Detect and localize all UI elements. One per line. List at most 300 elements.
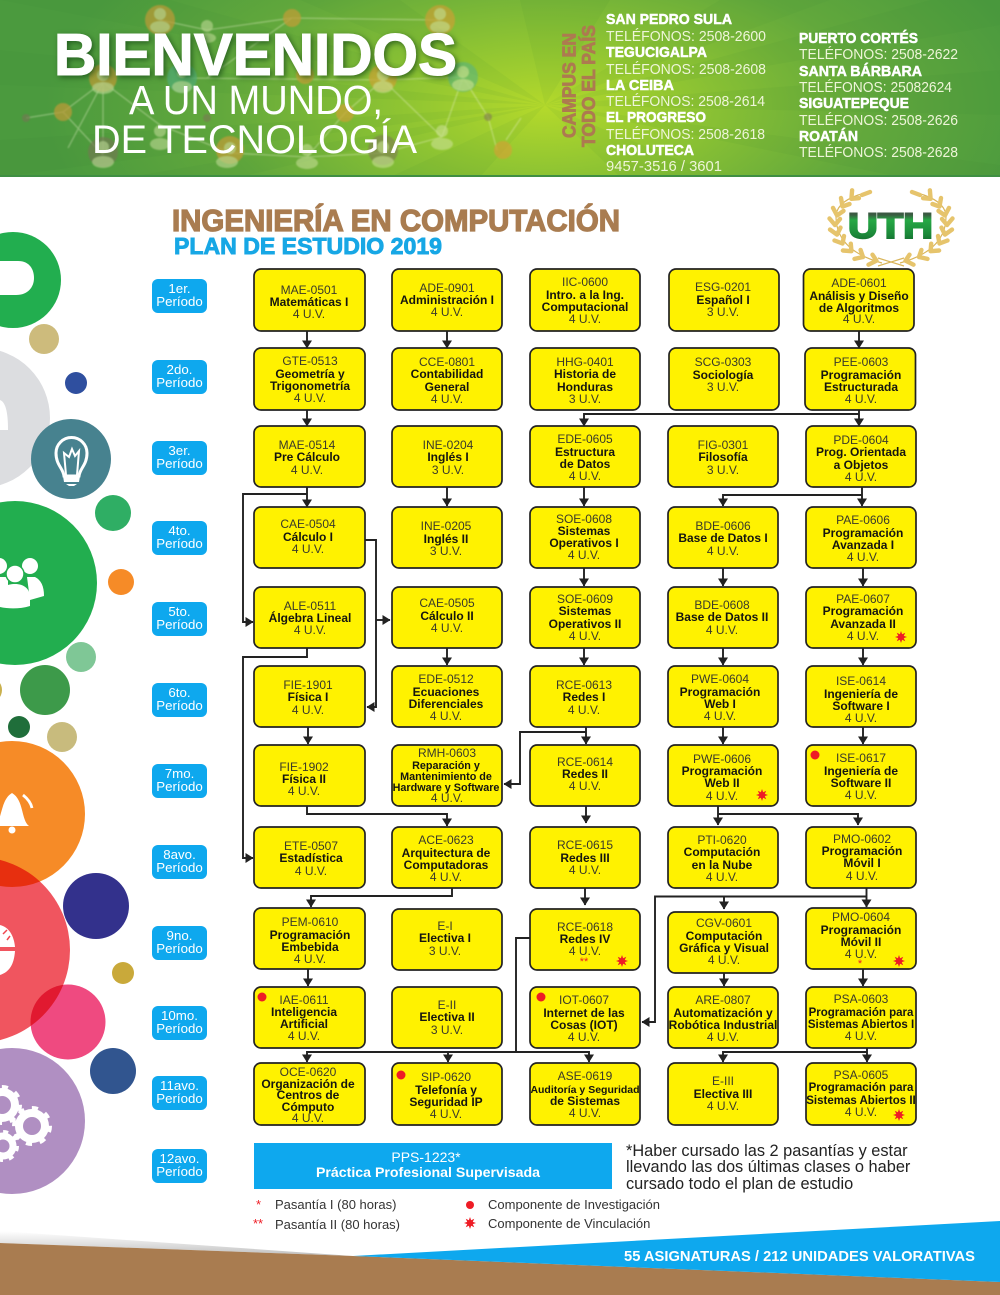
campus phones column 1: CHOLUTECA [606, 142, 694, 159]
period 2 [152, 360, 207, 394]
course: SIP-0620: 4 U.V. [430, 1107, 462, 1121]
campus phones column 2: TELÉFONOS: 2508-2622 [799, 46, 958, 63]
course: FIE-1901 [254, 666, 365, 727]
arrow: BDE-0608 to PWE-0604 [722, 648, 724, 665]
course: ADE-0901: ADE-0901 [419, 281, 475, 295]
course: RCE-0613: RCE-0613 [556, 678, 612, 692]
course: MAE-0501: MAE-0501 [281, 283, 338, 297]
campus phones column 1: EL PROGRESO [606, 109, 706, 126]
arrow: PAE-0607 to ISE-0614 [862, 648, 864, 665]
course: BDE-0608: 4 U.V. [706, 623, 738, 637]
course: ARE-0807: Automatización y [673, 1006, 773, 1020]
period 3 [152, 441, 207, 475]
course: RMH-0603: 4 U.V. [431, 791, 463, 805]
course: CCE-0801 [392, 348, 502, 410]
period 1: Período [156, 294, 203, 309]
period 2: Período [156, 375, 203, 390]
course: MAE-0501: Matemáticas I [270, 295, 348, 309]
arrow: CAE-0504 to CAE-0505 [376, 619, 390, 621]
arrow: MAE-0514 to ALE-0511 [243, 494, 307, 622]
course: E-II [392, 987, 502, 1048]
course: PMO-0604: * [858, 958, 863, 970]
course: PMO-0604: Móvil II [841, 935, 881, 949]
legend: vinculacion: Componente de Vinculación [488, 1216, 650, 1231]
icon circle: gears [0, 1048, 85, 1194]
course: IAE-0611: Inteligencia [271, 1005, 337, 1019]
course: IOT-0607 [530, 987, 640, 1048]
course: ETE-0507 [254, 827, 365, 888]
course: PWE-0604: PWE-0604 [691, 672, 749, 686]
arrow: ALE-0511 to ETE-0507 [243, 648, 307, 858]
heading: bienvenidos: BIENVENIDOS [54, 22, 457, 88]
period 11: 11avo. [160, 1078, 199, 1093]
course: FIG-0301 [668, 426, 778, 487]
course: ACE-0623: ACE-0623 [418, 833, 474, 847]
course: E-II: Electiva II [419, 1010, 475, 1024]
course: ARE-0807: 4 U.V. [707, 1030, 739, 1044]
course: E-III: Electiva III [694, 1087, 752, 1101]
period 10 [152, 1006, 207, 1040]
course: HHG-0401 [530, 348, 640, 410]
course: BDE-0608 [668, 587, 778, 648]
period 10: 10mo. [161, 1008, 198, 1023]
course: ASE-0619: Auditoría y Seguridad [530, 1084, 640, 1096]
course: OCE-0620 [254, 1063, 365, 1125]
course: PAE-0607: PAE-0607 [836, 592, 890, 606]
icon circle: people [0, 495, 131, 665]
course: HHG-0401: HHG-0401 [556, 355, 614, 369]
course: RMH-0603: Hardware y Software [393, 782, 499, 794]
course: PSA-0603: Sistemas Abiertos I [808, 1019, 914, 1031]
course: ADE-0901 [392, 269, 502, 331]
course: PEM-0610: 4 U.V. [294, 952, 326, 966]
course: RCE-0614: 4 U.V. [569, 779, 601, 793]
course: FIE-1901: Física I [288, 690, 328, 704]
course: FIE-1902: FIE-1902 [279, 760, 329, 774]
course: PAE-0606: Avanzada I [832, 538, 894, 552]
course: CAE-0505 [392, 587, 502, 648]
arrow: PEM-0610 to IAE-0611 [307, 969, 309, 986]
campus label: TODO EL PAÍS [578, 25, 599, 147]
period 3: 3er. [168, 443, 191, 458]
footer total text: 55 ASIGNATURAS / 212 UNIDADES VALORATIVAS [624, 1248, 975, 1265]
course: IOT-0607: Internet de las [543, 1006, 625, 1020]
arrow: PDE-0604 to PAE-0606 [861, 487, 863, 506]
arrow: RCE-0613 to RCE-0614 [585, 727, 587, 744]
course: INE-0205 [392, 507, 502, 568]
arrow: ADE-0601 to PEE-0603 [858, 331, 860, 348]
course: E-I: Electiva I [419, 931, 471, 945]
title: INGENIERÍA EN COMPUTACIÓN [172, 202, 620, 238]
legend [253, 1197, 660, 1232]
course: PDE-0604: a Objetos [834, 458, 889, 472]
course: BDE-0606: BDE-0606 [695, 519, 751, 533]
arrow: PDE-0604 to BDE-0606 [723, 495, 862, 506]
icon circle: lightbulb [31, 419, 111, 499]
course: PEE-0603: 4 U.V. [845, 392, 877, 406]
course: PMO-0602: 4 U.V. [846, 869, 878, 883]
legend: pasantia II: Pasantía II (80 horas) [275, 1217, 400, 1232]
course: E-III: E-III [712, 1074, 734, 1088]
course: ISE-0617 [806, 745, 916, 806]
logo: UTH laurel: UTH [848, 206, 933, 246]
course: IIC-0600: Intro. a la Ing. [546, 288, 624, 302]
course: PSA-0603: PSA-0603 [834, 992, 889, 1006]
course: SIP-0620 [392, 1063, 502, 1125]
course: EDE-0605: Estructura [555, 445, 615, 459]
period 6 [152, 683, 207, 717]
course: ISE-0617: Software II [831, 776, 891, 790]
requirement note: llevando las dos últimas clases o haber [626, 1158, 911, 1176]
course: RMH-0603: RMH-0603 [418, 746, 476, 760]
course: ISE-0614 [806, 666, 916, 727]
arrow: PMO-0602 to PMO-0604 [866, 888, 868, 907]
course: FIE-1902 [254, 745, 365, 806]
course: CAE-0504 [254, 507, 365, 568]
course: BDE-0606: 4 U.V. [707, 544, 739, 558]
campus phones column 2 [799, 30, 958, 161]
course: SIP-0620: SIP-0620 [421, 1070, 471, 1084]
course: PTI-0620: Computación [684, 845, 760, 859]
arrow: ISE-0614 to ISE-0617 [862, 727, 864, 744]
arrow: MAE-0501 to GTE-0513 [306, 331, 308, 348]
course: BDE-0608: Base de Datos II [676, 610, 768, 624]
period labels [152, 279, 207, 1183]
arrow: PMO-0602 to CGV-0601 [724, 896, 866, 909]
course: RCE-0615 [530, 827, 640, 888]
brown band [0, 1243, 1000, 1295]
period 5: 5to. [168, 604, 191, 619]
arrow: BDE-0606 to BDE-0608 [722, 568, 724, 586]
period 2: 2do. [167, 362, 192, 377]
period 4: 4to. [168, 523, 191, 538]
course: EDE-0512 [392, 666, 502, 727]
arrow: CAE-0505 to EDE-0512 [446, 648, 448, 665]
arrow: PWE-0606 to PTI-0620 [717, 806, 719, 825]
arrow: SOE-0609 to RCE-0613 [583, 648, 585, 665]
course: CAE-0504: CAE-0504 [280, 517, 336, 531]
course: IIC-0600: Computacional [542, 300, 628, 314]
course: PSA-0603 [806, 987, 916, 1048]
course: PTI-0620: 4 U.V. [706, 870, 738, 884]
campus phones column 2: TELÉFONOS: 2508-2626 [799, 112, 958, 129]
course: FIE-1901: FIE-1901 [283, 678, 333, 692]
arrow: PSA-0603 to PSA-0605 [866, 1048, 868, 1062]
arrow: PMO-0602 to IOT-0607 [642, 896, 724, 1022]
heading: a un mundo: A UN MUNDO, [129, 77, 383, 123]
course: MAE-0514: Pre Cálculo [274, 450, 340, 464]
course: PMO-0604: 4 U.V. [845, 947, 877, 961]
course: ASE-0619 [530, 1063, 640, 1125]
blue band [353, 1221, 1000, 1282]
course: IOT-0607: IOT-0607 [559, 993, 609, 1007]
course: ACE-0623: Arquitectura de [402, 846, 491, 860]
course: OCE-0620: OCE-0620 [280, 1065, 337, 1079]
course: ASE-0619: 4 U.V. [569, 1106, 601, 1120]
course: SOE-0609: Sistemas [559, 604, 612, 618]
course: BDE-0606 [668, 507, 778, 568]
arrow: PWE-0604 to PWE-0606 [722, 727, 724, 744]
course: INE-0205: 3 U.V. [430, 544, 462, 558]
course: SOE-0609: SOE-0609 [557, 592, 613, 606]
course: IIC-0600: 4 U.V. [569, 312, 601, 326]
course: E-III: 4 U.V. [707, 1099, 739, 1113]
course: PWE-0606: Web II [704, 776, 740, 790]
period 7: Período [156, 779, 203, 794]
course: ETE-0507: ETE-0507 [284, 839, 338, 853]
course: SOE-0609: Operativos II [549, 617, 621, 631]
course: FIE-1902: 4 U.V. [288, 784, 320, 798]
course: RCE-0618: ** [580, 956, 589, 968]
course: PAE-0607: 4 U.V. [847, 629, 879, 643]
period 12: 12avo. [160, 1151, 199, 1166]
arrow: FIE-1901 to FIE-1902 [307, 727, 309, 744]
arrow: PEE-0603 to PDE-0604 [858, 410, 860, 426]
course: PTI-0620 [668, 827, 778, 888]
course: SIP-0620: Seguridad IP [409, 1095, 483, 1109]
period 1: 1er. [168, 281, 191, 296]
course: PMO-0604: PMO-0604 [832, 910, 890, 924]
course: IAE-0611: Artificial [280, 1017, 328, 1031]
course: FIE-1901: 4 U.V. [292, 703, 324, 717]
icon circle: red [0, 857, 70, 1043]
arrow: RCE-0614 to RCE-0615 [585, 806, 587, 823]
course: CAE-0505: CAE-0505 [419, 596, 475, 610]
course: CAE-0505: Cálculo II [420, 609, 474, 623]
course: ASE-0619: ASE-0619 [558, 1069, 613, 1083]
course: CAE-0505: 4 U.V. [431, 621, 463, 635]
arrow: FIE-1902 to ACE-0623 [307, 806, 447, 826]
course: FIE-1902: Física II [282, 772, 326, 786]
course: PSA-0605: Programación para [809, 1082, 914, 1094]
course: EDE-0512: 4 U.V. [430, 709, 462, 723]
course: RCE-0618: Redes IV [560, 932, 610, 946]
course: ETE-0507: 4 U.V. [295, 864, 327, 878]
logo: UTH laurel [830, 190, 952, 266]
course: OCE-0620: Centros de [277, 1088, 340, 1102]
course: PAE-0607: Programación [823, 604, 903, 618]
course: GTE-0513: Trigonometría [270, 379, 350, 393]
period 9 [152, 926, 207, 960]
campus phones column 1: 9457-3516 / 3601 [606, 158, 722, 175]
course: RCE-0615: 4 U.V. [569, 863, 601, 877]
course: PDE-0604: PDE-0604 [833, 433, 889, 447]
header banner [0, 0, 1000, 177]
course: CGV-0601: 4 U.V. [708, 953, 740, 967]
course: PMO-0602: PMO-0602 [833, 832, 891, 846]
arrow: PSA-0603 to E-III [723, 1052, 867, 1062]
course: ETE-0507: Estadística [279, 851, 343, 865]
course: SCG-0303 [669, 348, 779, 410]
campus phones column 1: TELÉFONOS: 2508-2608 [606, 61, 766, 78]
connector: RCE-0618 branch [516, 938, 530, 1052]
course: ARE-0807: ARE-0807 [695, 993, 751, 1007]
course: ADE-0601: Análisis y Diseño [809, 289, 909, 303]
course: PWE-0606 [668, 745, 778, 806]
course: CCE-0801: General [425, 380, 469, 394]
campus phones column 1: LA CEIBA [606, 77, 674, 94]
course: MAE-0501 [254, 269, 365, 331]
campus phones column 1: TELÉFONOS: 2508-2614 [606, 93, 765, 110]
course: FIG-0301: 3 U.V. [707, 463, 739, 477]
course: PMO-0604: Programación [821, 923, 901, 937]
arrow: CGV-0601 to ARE-0807 [723, 973, 725, 986]
course: E-II: 3 U.V. [431, 1023, 463, 1037]
period 4: Período [156, 536, 203, 551]
course: MAE-0514: MAE-0514 [279, 438, 336, 452]
course: SCG-0303: Sociología [693, 368, 754, 382]
course: EDE-0605 [530, 426, 640, 487]
course: ISE-0617: ISE-0617 [836, 751, 886, 765]
course: GTE-0513 [254, 348, 365, 410]
course: INE-0204: Inglés I [427, 450, 469, 464]
course: E-II: E-II [438, 998, 456, 1012]
course: PWE-0606: PWE-0606 [693, 752, 751, 766]
period 6: 6to. [168, 685, 191, 700]
period 5: Período [156, 617, 203, 632]
course: MAE-0501: 4 U.V. [293, 307, 325, 321]
campus label [560, 25, 599, 147]
course: IAE-0611: 4 U.V. [288, 1029, 320, 1043]
course: RMH-0603: Reparación y [412, 760, 480, 772]
course: PWE-0604 [668, 666, 778, 727]
course: GTE-0513: Geometría y [275, 367, 345, 381]
campus phones column 1: TELÉFONOS: 2508-2618 [606, 126, 765, 143]
period 5 [152, 602, 207, 636]
course: CCE-0801: 4 U.V. [431, 392, 463, 406]
course: ADE-0601: ADE-0601 [831, 276, 887, 290]
arrow: PAE-0606 to PAE-0607 [862, 568, 864, 586]
small circles lower [30, 873, 136, 1094]
course: RCE-0615: RCE-0615 [557, 838, 613, 852]
course: IAE-0611 [254, 987, 365, 1048]
requirement note: cursado todo el plan de estudio [626, 1175, 853, 1193]
course: E-I: E-I [437, 919, 453, 933]
course: IOT-0607: Cosas (IOT) [550, 1018, 618, 1032]
connector arrows [243, 331, 867, 1062]
campus phones column 2: ROATÁN [799, 128, 858, 145]
practice banner PPS-1223: PPS-1223* [391, 1149, 461, 1165]
course: PEE-0603: PEE-0603 [834, 355, 889, 369]
course: RMH-0603 [392, 745, 502, 806]
course: PSA-0603: Programación para [809, 1007, 914, 1019]
period 6: Período [156, 698, 203, 713]
course: E-III [668, 1063, 778, 1125]
course: IIC-0600 [530, 269, 640, 331]
period 9: 9no. [167, 928, 192, 943]
course: PAE-0607 [806, 587, 916, 648]
course: EDE-0605: de Datos [560, 457, 611, 471]
arrow: EDE-0605 to SOE-0608 [583, 487, 585, 506]
course: ESG-0201: 3 U.V. [707, 305, 739, 319]
course: ADE-0601: 4 U.V. [843, 312, 875, 326]
period 9: Período [156, 941, 203, 956]
course: HHG-0401: Historia de [554, 367, 616, 381]
course: HHG-0401: Honduras [557, 380, 613, 394]
campus phones column 2: SANTA BÁRBARA [799, 63, 922, 80]
course: RCE-0613: Redes I [563, 690, 605, 704]
course: PSA-0605 [806, 1063, 916, 1125]
course: ARE-0807: Robótica Industrial [669, 1018, 777, 1032]
course: PAE-0607: Avanzada II [830, 617, 896, 631]
campus phones column 2: SIGUATEPEQUE [799, 95, 909, 112]
period 4 [152, 521, 207, 555]
course: EDE-0512: Diferenciales [409, 697, 484, 711]
course: RCE-0613 [530, 666, 640, 727]
course: EDE-0605: EDE-0605 [557, 432, 613, 446]
arrow: ACE-0623 to PEM-0610 [311, 888, 452, 907]
icon circle: bell [0, 741, 85, 887]
course: ACE-0623 [392, 827, 502, 888]
course: PAE-0606: Programación [823, 526, 903, 540]
course: CGV-0601: CGV-0601 [696, 916, 752, 930]
course: OCE-0620: Cómputo [282, 1100, 334, 1114]
course: PAE-0606 [806, 507, 916, 568]
course: GTE-0513: 4 U.V. [294, 391, 326, 405]
course: SOE-0608: SOE-0608 [556, 512, 612, 526]
arrow: RCE-0613 to RMH-0603 [504, 732, 586, 784]
course: ISE-0614: Software I [832, 699, 890, 713]
course: SOE-0608: Operativos I [549, 536, 619, 550]
course: CAE-0504: 4 U.V. [292, 542, 324, 556]
period 11: Período [156, 1091, 203, 1106]
course: PDE-0604: 4 U.V. [845, 470, 877, 484]
course: IIC-0600: IIC-0600 [562, 275, 608, 289]
course: ACE-0623: Computadoras [404, 858, 489, 872]
arrow: SOE-0608 to SOE-0609 [583, 568, 585, 586]
campus label: CAMPUS EN [560, 33, 580, 138]
course: ALE-0511: ALE-0511 [284, 599, 337, 613]
course: SOE-0609 [530, 587, 640, 648]
course: PDE-0604: Prog. Orientada [816, 445, 906, 459]
course: SOE-0608 [530, 507, 640, 568]
course: INE-0205: Inglés II [424, 532, 468, 546]
banner bottom edge [0, 175, 1000, 177]
course: PWE-0604: Programación [680, 685, 760, 699]
course: PEE-0603: Programación [821, 368, 901, 382]
course: PWE-0604: Web I [704, 697, 736, 711]
course: RCE-0618: RCE-0618 [557, 920, 613, 934]
period 7: 7mo. [165, 766, 194, 781]
course: RCE-0613: 4 U.V. [568, 703, 600, 717]
course: RMH-0603: Mantenimiento de [400, 771, 492, 783]
course: CCE-0801: CCE-0801 [419, 355, 475, 369]
course: PMO-0602: Programación [822, 844, 902, 858]
course: ESG-0201 [669, 269, 779, 331]
course: INE-0204: INE-0204 [423, 438, 474, 452]
arrow: MAE-0514 to CAE-0504 [306, 487, 308, 507]
course: ISE-0617: Ingeniería de [824, 764, 898, 778]
course: RCE-0614: Redes II [562, 767, 608, 781]
course: ADE-0601: de Algoritmos [819, 301, 899, 315]
course: ALE-0511: 4 U.V. [294, 623, 326, 637]
course: ISE-0617: 4 U.V. [845, 788, 877, 802]
course: MAE-0514 [254, 426, 365, 487]
course: E-I: 3 U.V. [429, 944, 461, 958]
arrow: CAE-0504 to FIE-1901 [365, 540, 376, 707]
course: ASE-0619: de Sistemas [550, 1094, 620, 1108]
course: ISE-0614: Ingeniería de [824, 687, 898, 701]
arrow: PMO-0604 to PSA-0603 [862, 969, 864, 986]
course: PMO-0602 [806, 827, 916, 888]
course: INE-0205: INE-0205 [421, 519, 472, 533]
period 3: Período [156, 456, 203, 471]
campus phones column 2: PUERTO CORTÉS [799, 30, 918, 47]
course: INE-0204 [392, 426, 502, 487]
course: PEE-0603: Estructurada [824, 380, 898, 394]
period 12 [152, 1149, 207, 1183]
course: ESG-0201: ESG-0201 [695, 280, 751, 294]
